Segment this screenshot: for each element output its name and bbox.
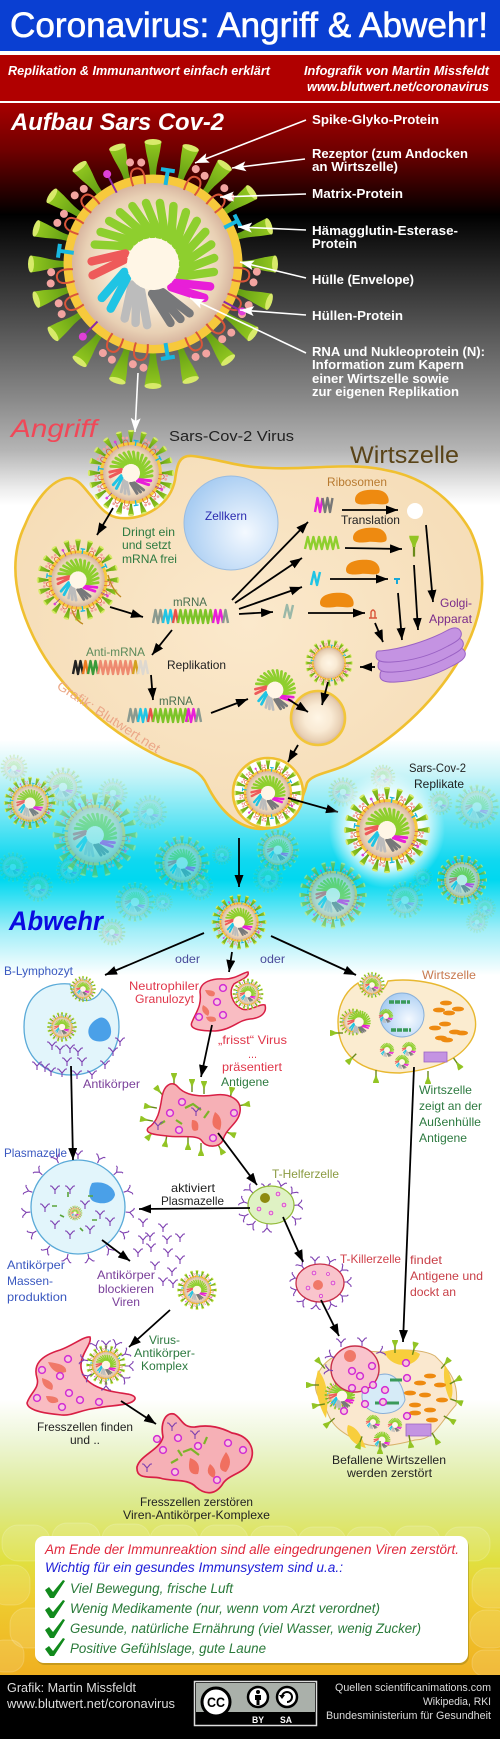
label: Antikörper Massenproduktion	[7, 1258, 67, 1304]
vesicle	[291, 691, 345, 745]
footer: Quellen scientificanimations.com	[335, 1682, 491, 1694]
callout: summary box	[35, 1536, 469, 1665]
label: Befallene Wirtszellen: Befallene Wirtszellen	[332, 1453, 446, 1467]
virus replicas: Replikate	[414, 777, 464, 791]
callout: summary box: Positive Gefühlslage, gute Laune	[70, 1641, 266, 1656]
label: Dringt ein: mRNA frei	[122, 552, 177, 566]
virus structure labels: Information zum Kapern	[312, 357, 464, 372]
label: Wirtszelle zeigt Antigene: Antigene	[419, 1131, 467, 1145]
virus structure labels: zur eigenen Replikation	[312, 384, 459, 399]
second mRNA strand: mRNA	[159, 694, 193, 708]
panel: Neutrophiler Granulozyt: Neutrophiler	[129, 979, 199, 993]
virus replicas	[329, 761, 466, 888]
title banner: Coronavirus: Angriff & Abwehr!	[10, 6, 488, 45]
panel: Neutrophiler Granulozyt: Granulozyt	[135, 992, 195, 1006]
label arrows	[135, 120, 306, 432]
label: Fresszellen zerstören: Viren-Antikörper-Komplexe	[123, 1508, 270, 1522]
label: T-Killerzelle: T-Killerzelle	[340, 1252, 401, 1266]
label: aktiviert Plasmazelle: aktiviert	[171, 1181, 216, 1195]
panel: B-Lymphozyt: B-Lymphozyt	[4, 964, 74, 978]
second mRNA strand	[128, 694, 201, 722]
panel: host cell infected: Wirtszelle	[422, 968, 476, 982]
virus structure labels: Matrix-Protein	[312, 186, 403, 201]
heading: Wirtszelle: Wirtszelle	[350, 442, 459, 469]
virus entering host	[88, 430, 174, 516]
panel: Plasmazelle	[4, 1146, 134, 1263]
callout: summary box: Wenig Medikamente (nur, wenn vom Arzt verordnet)	[70, 1601, 380, 1616]
label: Wirtszelle zeigt Antigene: Außenhülle	[419, 1115, 481, 1129]
icon: CC BY SA licence badge: CC	[207, 1694, 225, 1710]
label: T-Helferzelle: T-Helferzelle	[272, 1167, 339, 1181]
label: Befallene Wirtszellen: werden zerstört	[346, 1466, 433, 1480]
label: Fresszellen finden	[37, 1420, 133, 1447]
callout: summary box: Am Ende der Immunreaktion sind alle eingedrungenen Viren zerstört.	[44, 1542, 459, 1557]
label: frisst Virus	[218, 1033, 287, 1089]
label: Virus-Antikörper-Komplex: Komplex	[141, 1359, 188, 1373]
heading: Angriff: Angriff	[9, 415, 101, 443]
free antibodies	[133, 1219, 185, 1288]
heading: Abwehr: Abwehr	[8, 906, 104, 936]
icon: CC BY SA licence badge	[194, 1682, 316, 1726]
label: findet Antigene und dockt an	[410, 1253, 483, 1299]
panel: Plasmazelle: Plasmazelle	[4, 1146, 67, 1160]
label: findet Antigene und dockt an: findet	[410, 1253, 443, 1267]
label: Virus-Antikörper-Komplex: Antikörper-	[134, 1346, 195, 1360]
panel: B-Lymphozyt: Antikörper	[83, 1077, 140, 1091]
subtitle band: www.blutwert.net/coronavirus	[307, 79, 489, 94]
icon: virus shell	[305, 639, 353, 687]
label: oder: oder	[260, 952, 285, 966]
virus structure labels	[312, 112, 485, 399]
panel: destroying phagocyte	[137, 1414, 252, 1493]
label: Dringt ein: Dringt ein	[122, 525, 175, 539]
antigen presenting cell	[140, 1073, 250, 1156]
callout: summary box: Gesunde, natürliche Ernährung (viel Wasser, wenig Zucker)	[70, 1621, 421, 1636]
label: Wirtszelle zeigt Antigene	[419, 1083, 482, 1145]
heading: Aufbau Sars Cov-2: Aufbau Sars Cov-2	[10, 109, 225, 136]
panel: B-Lymphozyt	[4, 964, 140, 1091]
icon: check	[45, 1619, 65, 1638]
main virus diagram	[28, 139, 278, 389]
label: Fresszellen zerstören: Fresszellen zerstören	[140, 1495, 253, 1509]
virus structure labels: Spike-Glyko-Protein	[312, 112, 439, 127]
protein products	[369, 503, 423, 618]
label: Dringt ein	[122, 525, 177, 566]
label: Wirtszelle zeigt Antigene: Wirtszelle	[419, 1083, 472, 1097]
icon: CC BY SA licence badge: BY	[252, 1715, 264, 1725]
virus structure labels: Rezeptor (zum Andocken	[312, 146, 468, 161]
footer: Wikipedia, RKI	[423, 1696, 491, 1708]
label: Antikörper Massenproduktion: produktion	[7, 1290, 67, 1304]
virus structure labels: Hülle (Envelope)	[312, 272, 414, 287]
T-Killerzelle	[290, 1257, 351, 1309]
virus structure labels: einer Wirtszelle sowie	[312, 371, 449, 386]
nucleus	[184, 476, 278, 570]
label: Dringt ein: und setzt	[122, 538, 172, 552]
cell pattern background	[0, 1523, 500, 1676]
budding virus	[233, 758, 303, 828]
icon: check	[45, 1600, 65, 1618]
label: frisst Virus: Antigene	[221, 1075, 269, 1089]
label: Virus-Antikörper-Komplex	[134, 1333, 195, 1373]
label: Fresszellen finden: und ..	[70, 1433, 100, 1447]
nucleus: Zellkern	[205, 509, 247, 523]
label: Wirtszelle zeigt Antigene: zeigt an der	[419, 1099, 482, 1113]
label: frisst Virus: ...	[248, 1047, 257, 1061]
label: findet Antigene und dockt an: dockt an	[410, 1285, 456, 1299]
icon: CC BY SA licence badge: SA	[280, 1715, 292, 1725]
panel: destroyed host cell	[306, 1338, 464, 1454]
Golgi apparatus	[376, 596, 473, 682]
panel: Neutrophiler Granulozyt	[129, 972, 265, 1031]
label: Befallene Wirtszellen	[332, 1453, 446, 1480]
icon: virus opening	[37, 539, 121, 624]
label: Translation: Translation	[341, 513, 400, 527]
ribosomes	[320, 475, 389, 608]
label: Antikörper blockieren Viren: blockieren	[98, 1282, 154, 1296]
Golgi apparatus: Golgi-	[440, 596, 472, 610]
panel: host cell infected	[330, 968, 476, 1084]
label: Antikörper blockieren Viren: Antikörper	[97, 1268, 155, 1282]
icon: check	[45, 1580, 65, 1598]
label: oder: oder	[175, 952, 200, 966]
virus structure labels: RNA und Nukleoprotein (N):	[312, 344, 485, 359]
panel: host cell	[15, 456, 482, 829]
attack arrows	[97, 508, 433, 887]
icon: RNA assembling	[255, 670, 295, 710]
label: Antikörper blockieren Viren: Viren	[112, 1295, 140, 1309]
footer: Grafik: Martin Missfeldt	[7, 1680, 136, 1695]
mRNA fragments	[284, 498, 339, 618]
callout: summary box: Wichtig für ein gesundes Immunsystem sind u.a.:	[45, 1560, 343, 1575]
Anti-mRNA strand: Anti-mRNA	[86, 645, 145, 659]
subtitle band	[0, 55, 500, 101]
watermark: Grafik: Blutwert.net	[54, 678, 164, 756]
footer: Bundesministerium für Gesundheit	[326, 1710, 491, 1722]
label: Replikation: Replikation	[167, 658, 226, 672]
label: frisst Virus: präsentiert	[222, 1060, 283, 1074]
label: Antikörper blockieren Viren	[97, 1268, 155, 1309]
label: Antikörper Massenproduktion: Antikörper	[7, 1258, 65, 1272]
label: aktiviert Plasmazelle: Plasmazelle	[161, 1194, 224, 1208]
virus structure labels: an Wirtszelle)	[312, 159, 398, 174]
virus structure labels: Protein	[312, 236, 357, 251]
faded virus background	[0, 754, 499, 946]
callout: summary box: Viel Bewegung, frische Luft	[70, 1581, 234, 1596]
subtitle band: Replikation & Immunantwort einfach erklärt	[8, 63, 271, 78]
label: aktiviert Plasmazelle	[161, 1181, 224, 1208]
virus structure labels: Hämagglutin-Esterase-	[312, 223, 458, 238]
subtitle band: Infografik von Martin Missfeldt	[304, 63, 490, 78]
icon: check	[45, 1638, 65, 1656]
label: Fresszellen finden: Fresszellen finden	[37, 1420, 133, 1434]
mRNA strand	[153, 595, 228, 623]
icon: incoming virus	[212, 894, 266, 950]
footer	[0, 1675, 500, 1739]
label: Antikörper Massenproduktion: Massen-	[7, 1274, 53, 1288]
label: frisst Virus: „frisst“ Virus	[218, 1033, 287, 1047]
defence arrows	[71, 933, 414, 1424]
label: findet Antigene und dockt an: Antigene und	[410, 1269, 483, 1283]
label: Fresszellen zerstören	[123, 1495, 270, 1522]
label: Sars-Cov-2 Virus: Sars-Cov-2 Virus	[169, 428, 294, 445]
mRNA strand: mRNA	[173, 595, 207, 609]
Golgi apparatus: Apparat	[429, 612, 473, 626]
footer: www.blutwert.net/coronavirus	[6, 1696, 175, 1711]
T-Helferzelle	[239, 1181, 302, 1232]
icon: blocked virus	[177, 1270, 217, 1310]
Anti-mRNA strand	[73, 645, 148, 674]
virus replicas: Sars-Cov-2	[409, 761, 466, 775]
ribosomes: Ribosomen	[327, 475, 387, 489]
virus structure labels: Hüllen-Protein	[312, 308, 403, 323]
panel: Virus-Antikörper-Komplex	[27, 1337, 135, 1415]
label: Virus-Antikörper-Komplex: Virus-	[149, 1333, 180, 1347]
